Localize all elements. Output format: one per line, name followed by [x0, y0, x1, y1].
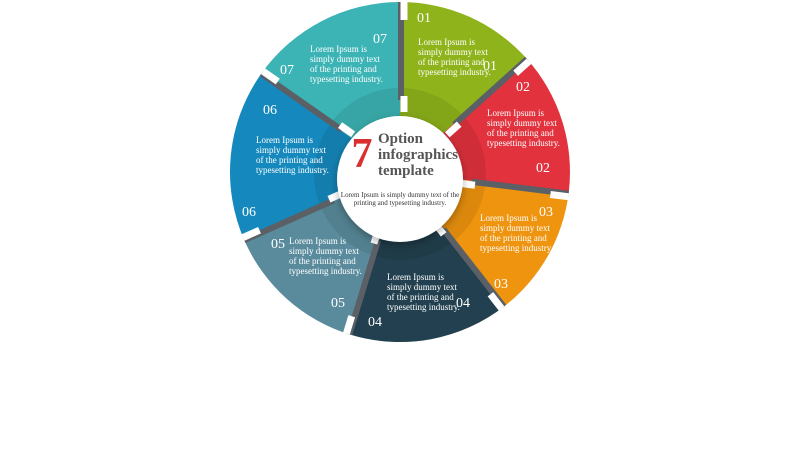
labels 03: [480, 205, 553, 292]
labels 05: of the printing and: [289, 256, 356, 266]
labels 04: typesetting industry.: [387, 302, 460, 312]
segment 04 navy: [350, 172, 505, 342]
labels 07: simply dummy text: [310, 54, 380, 64]
segment 02 red: [400, 58, 570, 193]
center title: template: [378, 163, 434, 179]
labels 02: typesetting industry.: [487, 138, 560, 148]
labels 02: Lorem Ipsum is: [487, 108, 544, 118]
labels 07: of the printing and: [310, 64, 377, 74]
labels 01: of the printing and: [418, 57, 485, 67]
labels 07: [280, 32, 387, 84]
labels 07: 07: [373, 32, 387, 47]
segment 03 orange: [400, 172, 569, 306]
labels 04: 04: [368, 315, 382, 330]
labels 07: 07: [280, 63, 294, 78]
labels 06: simply dummy text: [256, 145, 326, 155]
labels 07: typesetting industry.: [310, 74, 383, 84]
center title: Option: [378, 131, 424, 147]
labels 02: 02: [516, 80, 530, 95]
labels 05: 05: [331, 296, 345, 311]
labels 03: typesetting industry.: [480, 243, 553, 253]
center title: infographics: [378, 147, 458, 163]
center circle: [337, 116, 463, 242]
labels 02: [487, 80, 560, 176]
labels 06: 06: [242, 205, 256, 220]
segment 05 slate: [245, 172, 400, 335]
labels 06: 06: [263, 103, 277, 118]
segment 01 green: [400, 2, 526, 172]
labels 04: 04: [456, 296, 470, 311]
segment 07 teal: [261, 2, 400, 172]
labels 03: Lorem Ipsum is: [480, 213, 537, 223]
labels 01: 01: [417, 11, 431, 26]
wheel: [230, 2, 570, 342]
labels 06: [242, 103, 329, 220]
labels 03: of the printing and: [480, 233, 547, 243]
labels 05: typesetting industry.: [289, 266, 362, 276]
labels 02: simply dummy text: [487, 118, 558, 128]
labels 06: typesetting industry.: [256, 165, 329, 175]
labels 04: Lorem Ipsum is: [387, 272, 444, 282]
labels 01: typesetting industry.: [418, 67, 491, 77]
labels 05: 05: [271, 237, 285, 252]
labels 07: Lorem Ipsum is: [310, 44, 367, 54]
labels 06: Lorem Ipsum is: [256, 135, 313, 145]
labels 05: simply dummy text: [289, 246, 360, 256]
labels 03: 03: [539, 205, 553, 220]
labels 04: simply dummy text: [387, 282, 458, 292]
labels 03: simply dummy text: [480, 223, 550, 233]
big number 7: 7: [352, 131, 372, 177]
labels 02: 02: [536, 161, 550, 176]
labels 01: [417, 11, 497, 77]
center description: Lorem Ipsum is simply dummy text of the: [341, 191, 459, 199]
labels 01: 01: [483, 59, 497, 74]
labels 06: of the printing and: [256, 155, 323, 165]
labels 04: [368, 272, 470, 330]
labels 02: of the printing and: [487, 128, 554, 138]
labels 01: simply dummy text: [418, 47, 488, 57]
segment 06 blue: [230, 74, 400, 241]
labels 03: 03: [494, 277, 508, 292]
labels 05: Lorem Ipsum is: [289, 236, 346, 246]
center description: printing and typesetting industry.: [354, 199, 446, 207]
labels 05: [271, 236, 362, 311]
labels 01: Lorem Ipsum is: [418, 37, 475, 47]
labels 04: of the printing and: [387, 292, 454, 302]
